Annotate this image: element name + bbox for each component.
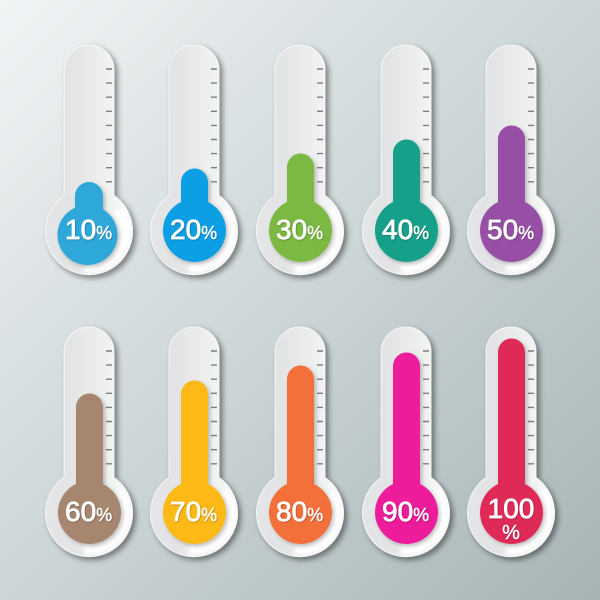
label: 100%: 100 [488, 493, 534, 524]
thermometer: 10% [46, 45, 132, 275]
fill: 10% [57, 182, 117, 265]
thermometer: 30% [256, 45, 344, 275]
label: 90%: 90% [382, 496, 429, 527]
label: 70%: 70% [170, 496, 217, 527]
thermometer: 20% [150, 45, 238, 275]
fill: 60% [58, 394, 121, 544]
thermometer: 90% [362, 327, 450, 557]
fill: 70% [163, 380, 226, 544]
fill: 20% [163, 168, 226, 262]
fill: 30% [269, 154, 332, 262]
thermometer: 60% [46, 327, 132, 557]
fill: 50% [480, 126, 543, 262]
fill: 90% [375, 352, 438, 544]
thermometer: 100% [468, 327, 554, 557]
label: 10%: 10% [65, 214, 112, 245]
thermometer: 50% [468, 45, 554, 275]
label: 50%: 50% [487, 214, 534, 245]
thermometer: 70% [150, 327, 238, 557]
label: 60%: 60% [65, 496, 112, 527]
fill: 80% [269, 366, 332, 544]
fill: 40% [375, 140, 438, 262]
thermometer: 40% [362, 45, 450, 275]
label: 80%: 80% [276, 496, 323, 527]
label: 20%: 20% [170, 214, 217, 245]
label: 30%: 30% [276, 214, 323, 245]
label: 40%: 40% [382, 214, 429, 245]
fill: 100% [480, 338, 543, 544]
label: 100%: % [502, 522, 520, 544]
thermometer: 80% [256, 327, 344, 557]
